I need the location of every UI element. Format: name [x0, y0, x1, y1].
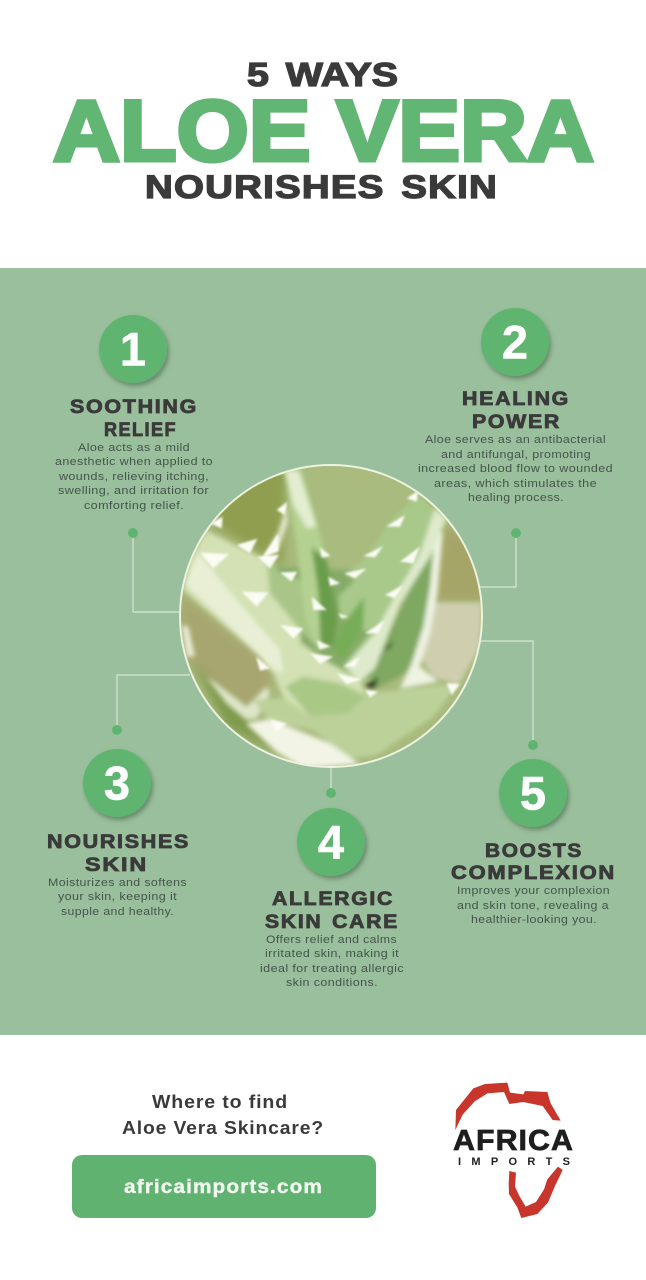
aloe vera photo circle [170, 460, 490, 780]
heading 5: COMPLEXION [451, 863, 616, 884]
small centre shoot [333, 597, 364, 658]
item 5: boosts complexion [451, 759, 616, 926]
title line: 5 ways: 5 WAYS [247, 56, 398, 93]
body 5: Improves your complexion [457, 885, 610, 897]
panel: five ways [0, 268, 646, 1035]
heading 3: NOURISHES [47, 832, 190, 853]
body 1: Aloe acts as a mild [78, 442, 190, 454]
dark gaps [363, 677, 378, 688]
body 2: increased blood flow to wounded [418, 463, 613, 475]
body 1 [55, 442, 213, 512]
body 3: your skin, keeping it [58, 891, 178, 903]
badge 5: 5 [520, 766, 546, 820]
heading 5 [451, 841, 616, 884]
body 4: irritated skin, making it [265, 948, 400, 960]
badge 1: 1 [120, 322, 146, 376]
body 3 [48, 877, 187, 918]
heading 1 [70, 397, 198, 441]
body 3: supple and healthy. [61, 906, 174, 918]
lower right background leaf [420, 603, 482, 685]
website button: africaimports.com [124, 1177, 323, 1198]
connector 5 [478, 641, 538, 750]
dark shadow behind leaves [270, 567, 377, 680]
body 2 [418, 434, 613, 504]
connector 1 [128, 528, 182, 612]
bottom leaf [253, 683, 458, 758]
body 4: Offers relief and calms [266, 934, 397, 946]
title [53, 56, 594, 205]
heading 1: SOOTHING [70, 397, 198, 418]
heading 2 [462, 389, 570, 433]
title line: aloe vera: ALOE VERA [53, 84, 594, 180]
icon: africa outline bottom [509, 1167, 563, 1218]
footer question [122, 1092, 324, 1138]
body 4: ideal for treating allergic [260, 963, 404, 975]
right leaf [336, 498, 434, 663]
footer question: Aloe Vera Skincare? [122, 1118, 324, 1138]
heading 2: HEALING [462, 389, 570, 410]
badge 3: 3 [104, 756, 130, 810]
body 3: Moisturizes and softens [48, 877, 187, 889]
body 4 [260, 934, 404, 989]
badge 2 [481, 308, 549, 376]
badge 2: 2 [502, 316, 528, 368]
body 1: wounds, relieving itching, [58, 471, 209, 483]
lower left white margin [207, 677, 270, 720]
connector 2 [478, 528, 521, 587]
heading 4: ALLERGIC [272, 889, 394, 910]
leaf spines [200, 491, 460, 732]
heading 1: RELIEF [104, 420, 177, 441]
body 5: healthier-looking you. [471, 914, 597, 926]
badge 5 [499, 759, 567, 827]
body 1: comforting relief. [84, 500, 184, 512]
body 2: areas, which stimulates the [434, 478, 597, 490]
heading 4: SKIN CARE [265, 912, 399, 933]
body 4: skin conditions. [286, 977, 378, 989]
icon: africa outline top [455, 1083, 561, 1130]
back left leaf [268, 530, 316, 644]
website button [72, 1155, 376, 1218]
item 4: allergic skin care [260, 808, 404, 989]
body 2: and antifungal, promoting [441, 449, 591, 461]
item 1: soothing relief [55, 315, 213, 512]
item 3: nourishes skin [47, 749, 190, 918]
logo: africa imports: AFRICA [453, 1125, 574, 1157]
badge 4: 4 [318, 816, 344, 868]
bottom white leaf [246, 719, 359, 768]
centre leaf [284, 471, 326, 652]
logo: africa imports [453, 1083, 574, 1218]
badge 3 [83, 749, 151, 817]
footer question: Where to find [152, 1092, 288, 1112]
body 2: healing process. [468, 492, 564, 504]
body 1: swelling, and irritation for [58, 485, 209, 497]
connector 3 [112, 675, 190, 735]
body 5 [457, 885, 610, 926]
heading 3 [47, 832, 190, 876]
item 2: healing power [418, 308, 613, 504]
title line: nourishes skin: NOURISHES SKIN [145, 169, 498, 205]
body 1: anesthetic when applied to [55, 456, 213, 468]
big left leaf [183, 531, 367, 716]
heading 4 [265, 889, 399, 933]
connector 4 [326, 766, 336, 798]
heading 2: POWER [472, 412, 561, 433]
body 2: Aloe serves as an antibacterial [425, 434, 606, 446]
badge 1 [99, 315, 167, 383]
badge 4 [297, 808, 365, 876]
heading 3: SKIN [85, 855, 148, 876]
body 5: and skin tone, revealing a [457, 900, 609, 912]
heading 5: BOOSTS [485, 841, 583, 862]
back right leaf [373, 555, 433, 689]
logo: africa imports: IMPORTS [458, 1156, 570, 1168]
